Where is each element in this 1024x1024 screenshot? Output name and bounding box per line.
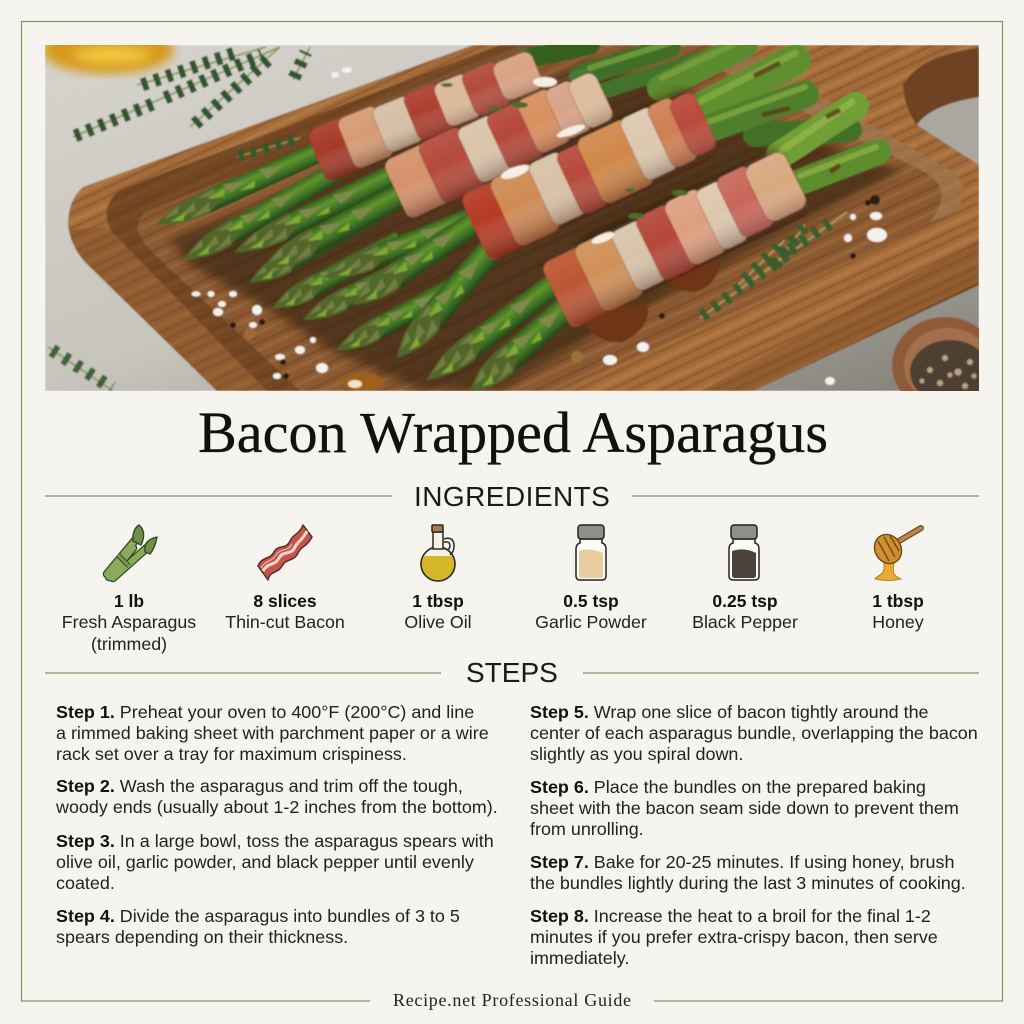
step 1: a rimmed baking sheet with parchment paper or a wire (56, 723, 489, 743)
thyme sprigs on board (48, 138, 847, 391)
salt and pepper specks (192, 67, 887, 385)
ingredient: garlic powder (535, 591, 647, 632)
step 5 (530, 702, 978, 764)
hero photo: bacon wrapped asparagus on wooden board (45, 45, 979, 391)
step 8 (530, 906, 938, 968)
ingredient: asparagus: 1 lb (114, 591, 144, 611)
step 7 (530, 852, 966, 893)
step 1 (56, 702, 489, 764)
step 6: sheet with the bacon seam side down to prevent them (530, 798, 959, 818)
ingredient: olive oil: 1 tbsp (412, 591, 464, 611)
footer credit: Recipe.net Professional Guide (393, 990, 632, 1010)
ingredient: bacon: 8 slices (253, 591, 317, 611)
step 2: Step 2. Wash the asparagus and trim off the tough, (56, 776, 463, 796)
honey pools (585, 305, 648, 342)
bacon bundle 2 (382, 64, 618, 221)
ingredient: asparagus: (trimmed) (91, 634, 167, 654)
step 5: slightly as you spiral down. (530, 744, 743, 764)
step 6 (530, 777, 959, 839)
step 4: Step 4. Divide the asparagus into bundles of 3 to 5 (56, 906, 460, 926)
oil bowl (42, 26, 174, 74)
step 6: from unrolling. (530, 819, 644, 839)
board side and top (85, 225, 979, 391)
step 3 (56, 831, 494, 893)
step 4 (56, 906, 460, 947)
back stalks (530, 42, 878, 182)
step 3: coated. (56, 873, 115, 893)
ingredient: bacon (225, 591, 345, 632)
step 3: olive oil, garlic powder, and black pepper until evenly (56, 852, 474, 872)
ingredient: asparagus (62, 591, 196, 654)
step 5: Step 5. Wrap one slice of bacon tightly around the (530, 702, 929, 722)
step 8: immediately. (530, 948, 629, 968)
step 4: spears depending on their thickness. (56, 927, 348, 947)
bacon bundle 4 (540, 147, 813, 330)
herbs on bacon (441, 83, 688, 219)
heading: ingredients: INGREDIENTS (414, 481, 610, 512)
pepper bowl (892, 317, 998, 413)
icon: asparagus (107, 525, 157, 578)
icon: garlic powder jar (576, 525, 606, 580)
step 2: woody ends (usually about 1-2 inches from the bottom). (56, 797, 498, 817)
step 8: Step 8. Increase the heat to a broil for the final 1-2 (530, 906, 931, 926)
step 5: center of each asparagus bundle, overlapping the bacon (530, 723, 978, 743)
honey glaze highlights (499, 77, 616, 246)
icon: olive oil bottle (421, 525, 455, 581)
dark shadow between bacon rows (500, 100, 780, 248)
title: Bacon Wrapped Asparagus (198, 400, 828, 465)
asparagus spears (245, 201, 385, 292)
step 7: the bundles lightly during the last 3 minutes of cooking. (530, 873, 966, 893)
step 6: Step 6. Place the bundles on the prepared baking (530, 777, 926, 797)
ingredient: black pepper: 0.25 tsp (712, 591, 778, 611)
step 2 (56, 776, 498, 817)
ingredient: bacon: Thin-cut Bacon (225, 612, 345, 632)
step 8: minutes if you prefer extra-crispy bacon, then serve (530, 927, 938, 947)
heading: steps: STEPS (466, 657, 558, 688)
ingredient: honey: Honey (872, 612, 924, 632)
step 7: Step 7. Bake for 20-25 minutes. If using honey, brush (530, 852, 954, 872)
step 1: rack set over a tray for maximum crispiness. (56, 744, 407, 764)
ingredient: garlic powder: Garlic Powder (535, 612, 647, 632)
ingredient: black pepper (692, 591, 798, 632)
ingredient: black pepper: Black Pepper (692, 612, 798, 632)
ingredient: honey: 1 tbsp (872, 591, 924, 611)
board well (107, 45, 964, 391)
ingredient: asparagus: Fresh Asparagus (62, 612, 196, 632)
ingredient: olive oil (404, 591, 472, 632)
icon: honey dipper (869, 528, 921, 580)
step 3: Step 3. In a large bowl, toss the asparagus spears with (56, 831, 494, 851)
icon: black pepper jar (729, 525, 759, 580)
shadows under food (170, 60, 900, 390)
step 1: Step 1. Preheat your oven to 400°F (200°C) and line (56, 702, 474, 722)
ingredient: garlic powder: 0.5 tsp (563, 591, 619, 611)
bacon bundle 3 (459, 87, 722, 262)
handle cut-out (903, 48, 979, 125)
thyme sprigs on counter (73, 47, 310, 137)
bacon bundle 1 (306, 42, 548, 183)
ingredient: olive oil: Olive Oil (404, 612, 472, 632)
ingredient: honey (872, 591, 924, 632)
icon: bacon (258, 525, 312, 580)
